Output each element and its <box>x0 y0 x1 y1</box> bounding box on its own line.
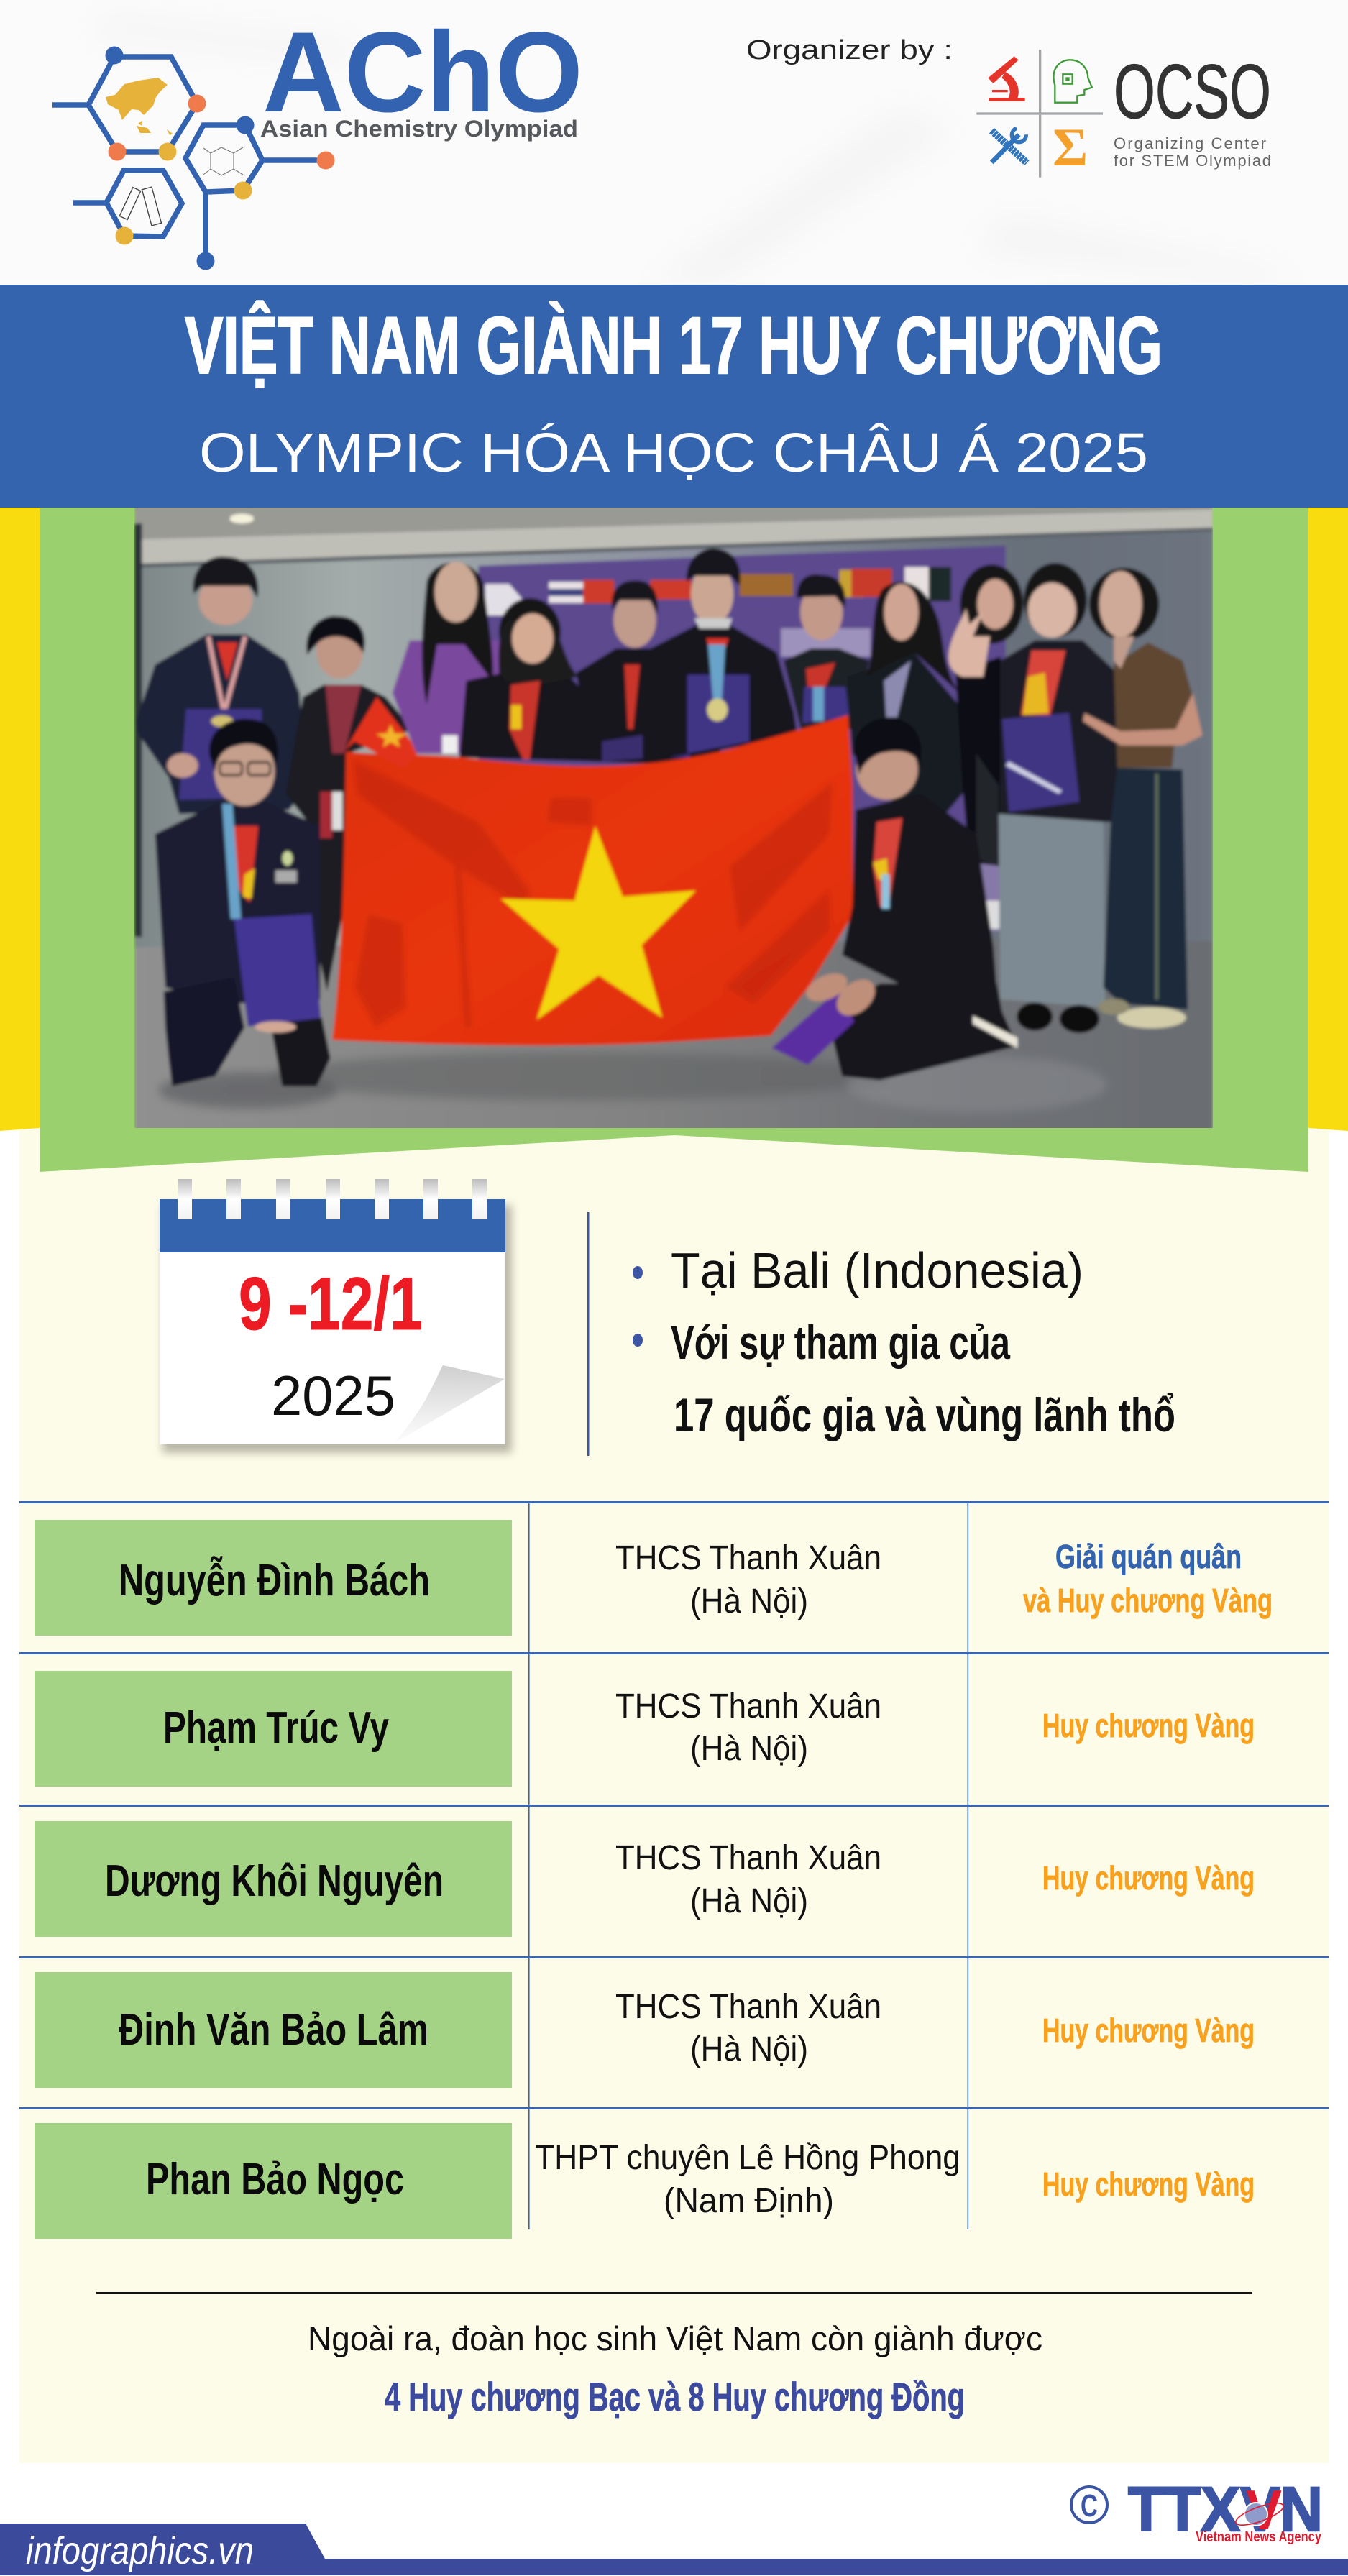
name box <box>35 1520 512 1636</box>
site name: infographics.vn <box>26 2529 254 2572</box>
red V: V <box>1246 2478 1282 2541</box>
agency tagline: Vietnam News Agency <box>1196 2529 1322 2545</box>
OCSO subtitle line 1: Organizing Center <box>1114 134 1266 152</box>
side yellow strips <box>0 508 1348 1131</box>
city: (Hà Nội) <box>690 1882 808 1920</box>
name: Nguyễn Đình Bách <box>119 1556 430 1605</box>
participation line 1: Với sự tham gia của <box>671 1316 1011 1369</box>
name: Đinh Văn Bảo Lâm <box>119 2005 428 2055</box>
award line 2: và Huy chương Vàng <box>1023 1582 1273 1619</box>
title band <box>0 285 1348 508</box>
school: THCS Thanh Xuân <box>615 1539 881 1577</box>
bullet <box>633 1266 643 1279</box>
participation line 2: 17 quốc gia và vùng lãnh thổ <box>674 1388 1175 1441</box>
summary sentence: Ngoài ra, đoàn học sinh Việt Nam còn giành được <box>308 2319 1042 2357</box>
footer bar <box>0 2524 1348 2575</box>
calendar header <box>160 1199 505 1252</box>
subtitle: OLYMPIC HÓA HỌC CHÂU Á 2025 <box>199 422 1148 484</box>
school: THCS Thanh Xuân <box>615 1687 881 1725</box>
icon: OCSO quadrant symbols <box>976 50 1103 178</box>
name box <box>35 2123 512 2239</box>
name box <box>35 1972 512 2088</box>
school: THCS Thanh Xuân <box>615 1839 881 1877</box>
table grid <box>19 1501 1329 2229</box>
year: 2025 <box>271 1364 395 1427</box>
award: Huy chương Vàng <box>1042 1859 1255 1897</box>
name: Phan Bảo Ngọc <box>146 2155 404 2204</box>
city: (Hà Nội) <box>690 1730 808 1768</box>
award line 1: Giải quán quân <box>1055 1538 1242 1575</box>
location: Tại Bali (Indonesia) <box>671 1242 1083 1298</box>
row 2 <box>35 1671 1255 1787</box>
bullet <box>633 1334 643 1347</box>
award: Huy chương Vàng <box>1042 2165 1255 2203</box>
copyright symbol: C <box>1081 2488 1098 2524</box>
OCSO wordmark: OCSO <box>1114 48 1271 134</box>
name box <box>35 1671 512 1787</box>
city: (Nam Định) <box>664 2182 834 2220</box>
photo: front kneeling students <box>155 719 331 1086</box>
summary <box>96 2292 1252 2419</box>
photo: back row people <box>136 556 726 991</box>
logo tagline: Asian Chemistry Olympiad <box>260 116 578 142</box>
date: 9 -12/1 <box>239 1262 423 1346</box>
row 5 <box>35 2123 1255 2239</box>
icon: OCSO quadrant symbols: Σ <box>1053 118 1088 178</box>
header background <box>0 0 1348 285</box>
row 1 <box>35 1520 1273 1636</box>
calendar <box>160 1179 512 1453</box>
results table <box>19 1501 1329 2239</box>
TTXVN logo <box>1071 2475 1323 2545</box>
city: (Hà Nội) <box>690 2030 808 2068</box>
name box <box>35 1821 512 1937</box>
organizer label: Organizer by : <box>746 35 953 65</box>
team photo <box>134 503 1213 1136</box>
school: THPT chuyên Lê Hồng Phong <box>535 2139 960 2177</box>
school: THCS Thanh Xuân <box>615 1988 881 2026</box>
calendar shadow <box>162 1205 512 1453</box>
calendar rings <box>178 1179 487 1219</box>
calendar page <box>160 1252 505 1444</box>
summary highlight: 4 Huy chương Bạc và 8 Huy chương Đồng <box>385 2374 965 2419</box>
award: Huy chương Vàng <box>1042 1707 1255 1744</box>
page curl <box>393 1365 505 1444</box>
event facts <box>633 1242 1175 1441</box>
cream content panel <box>19 1128 1329 2463</box>
row 3 <box>35 1821 1255 1937</box>
copyright symbol <box>1071 2487 1107 2524</box>
green ribbon frame <box>40 508 1308 1172</box>
OCSO logo <box>976 48 1271 178</box>
award: Huy chương Vàng <box>1042 2012 1255 2049</box>
photo wall, ceiling and floor (zoom coords) <box>134 503 1213 1136</box>
icon: globe <box>1234 2499 1285 2529</box>
agency wordmark: TTXVN <box>1128 2475 1323 2544</box>
name: Dương Khôi Nguyên <box>105 1856 444 1906</box>
icon: hexagon network <box>52 46 335 270</box>
row 4 <box>35 1972 1255 2088</box>
OCSO subtitle line 2: for STEM Olympiad <box>1114 152 1271 170</box>
event divider <box>587 1212 590 1456</box>
logo wordmark: AChO <box>262 8 583 136</box>
name: Phạm Trúc Vy <box>163 1703 389 1753</box>
AChO logo <box>52 8 583 270</box>
city: (Hà Nội) <box>690 1582 808 1621</box>
photo: Vietnamese flag <box>332 697 853 1045</box>
